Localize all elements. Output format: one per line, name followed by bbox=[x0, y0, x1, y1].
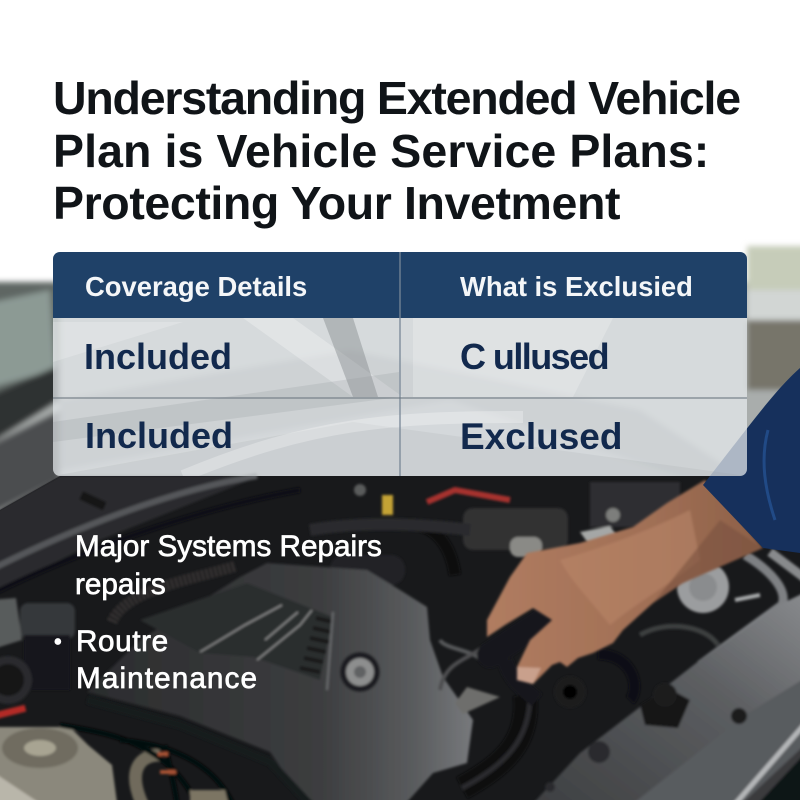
list: major systems repairs: Major Systems Repairs bbox=[75, 530, 382, 563]
title: Understanding Extended Vehicle bbox=[53, 72, 740, 124]
list: routine maintenance: Routre bbox=[76, 625, 169, 658]
hand and arm bbox=[487, 480, 763, 684]
table header bbox=[53, 252, 747, 318]
dark engine bay bbox=[0, 476, 800, 800]
row 2 right cell: Exclused bbox=[460, 416, 622, 457]
upper blurred background bbox=[0, 246, 800, 520]
right engine parts bbox=[677, 561, 729, 613]
list: major systems repairs bbox=[75, 530, 382, 601]
title: Protecting Your Invetment bbox=[53, 177, 620, 229]
radiator rail bbox=[527, 590, 800, 800]
black hoses bbox=[462, 695, 526, 788]
row 1 right cell: C ullused bbox=[460, 336, 608, 377]
list: major systems repairs: repairs bbox=[75, 568, 166, 601]
engine cover bbox=[87, 563, 473, 800]
battery and parts behind the hand bbox=[463, 508, 568, 550]
title bbox=[53, 72, 740, 229]
lower hoses bbox=[136, 755, 160, 800]
tool handle bbox=[490, 617, 548, 655]
coverage table panel bbox=[53, 252, 747, 476]
row 2 left cell: Included bbox=[85, 415, 233, 456]
row 1 left cell: Included bbox=[84, 336, 232, 377]
list: routine maintenance: Maintenance bbox=[76, 662, 258, 695]
header: what is excluded: What is Exclusied bbox=[460, 271, 693, 302]
header: coverage details: Coverage Details bbox=[85, 271, 307, 302]
sleeve bbox=[703, 368, 800, 553]
list: routine maintenance bbox=[54, 625, 258, 695]
list: routine maintenance: • bbox=[54, 629, 62, 654]
reservoir cap bbox=[0, 727, 118, 800]
title: Plan is Vehicle Service Plans: bbox=[53, 124, 709, 176]
corrugated hose bbox=[112, 566, 236, 622]
left components bbox=[20, 603, 75, 639]
